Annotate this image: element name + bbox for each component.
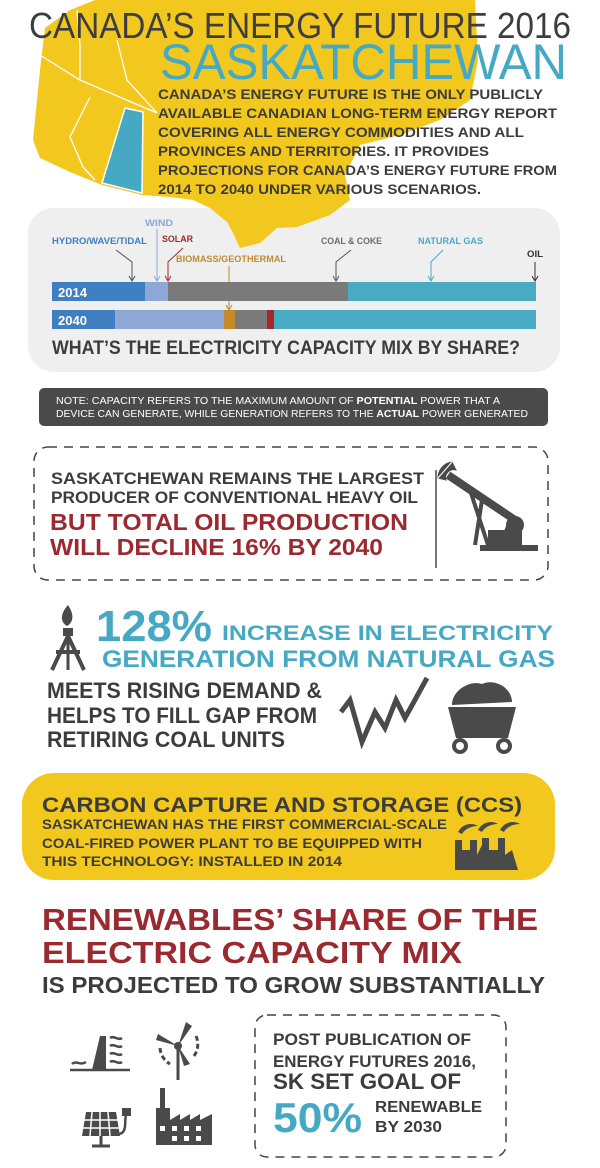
- heading: renewables: ELECTRIC CAPACITY MIX: [42, 935, 462, 970]
- intro paragraph: PROJECTIONS FOR CANADA’S ENERGY FUTURE FROM: [158, 162, 557, 178]
- subtitle: saskatchewan: SASKATCHEWAN: [160, 34, 567, 90]
- panel: carbon capture: THIS TECHNOLOGY: INSTALLED IN 2014: [42, 854, 343, 869]
- chart question: WHAT’S THE ELECTRICITY CAPACITY MIX BY SHARE?: [52, 338, 520, 359]
- legend labels: NATURAL GAS: [418, 236, 483, 246]
- panel: oil production: WILL DECLINE 16% BY 2040: [50, 534, 383, 560]
- icon: gas flare: [52, 605, 84, 670]
- legend labels: COAL & COKE: [321, 236, 382, 246]
- panel: 50% goal: ENERGY FUTURES 2016,: [273, 1052, 476, 1071]
- section: natural gas: MEETS RISING DEMAND &: [47, 678, 322, 703]
- icon: solar panel: [82, 1108, 131, 1146]
- panel: oil production: SASKATCHEWAN REMAINS THE LARGEST: [51, 469, 425, 488]
- section: natural gas: GENERATION FROM NATURAL GAS: [102, 646, 555, 673]
- panel: 50% goal: 50%: [273, 1094, 362, 1141]
- icon: factory: [156, 1088, 212, 1145]
- legend labels: WIND: [145, 218, 174, 228]
- note box: NOTE: CAPACITY REFERS TO THE MAXIMUM AMOUNT OF POTENTIAL POWER THAT A: [56, 395, 500, 407]
- legend labels: OIL: [527, 249, 544, 259]
- panel: carbon capture: COAL-FIRED POWER PLANT TO BE EQUIPPED WITH: [42, 836, 422, 851]
- bar 2040: [52, 310, 536, 329]
- panel: 50% goal: POST PUBLICATION OF: [273, 1030, 471, 1049]
- legend labels: SOLAR: [162, 234, 193, 244]
- panel: 50% goal: [255, 1015, 506, 1157]
- icon: pump jack: [436, 462, 538, 568]
- title: CANADA’S ENERGY FUTURE 2016: [29, 5, 571, 46]
- section: natural gas: RETIRING COAL UNITS: [47, 727, 285, 752]
- note box: [39, 388, 548, 426]
- icon: wind turbine: [156, 1022, 198, 1080]
- panel: 50% goal: BY 2030: [375, 1119, 442, 1136]
- intro paragraph: COVERING ALL ENERGY COMMODITIES AND ALL: [158, 124, 524, 140]
- icon: dam: [70, 1036, 130, 1070]
- arrows: [116, 229, 538, 310]
- heading: renewables: [42, 902, 545, 998]
- bar 2014: 2014: [58, 285, 88, 300]
- icon: zigzag chart: [341, 678, 427, 742]
- intro paragraph: PROVINCES AND TERRITORIES. IT PROVIDES: [158, 143, 489, 159]
- panel: oil production: PRODUCER OF CONVENTIONAL HEAVY OIL: [51, 488, 418, 507]
- section: natural gas: 128%: [96, 602, 212, 651]
- map: saskatchewan: [102, 108, 143, 193]
- icon: power plant: [455, 822, 520, 870]
- legend labels: HYDRO/WAVE/TIDAL: [52, 236, 148, 246]
- panel: oil production: [34, 447, 548, 580]
- panel: carbon capture: SASKATCHEWAN HAS THE FIRST COMMERCIAL-SCALE: [42, 817, 447, 832]
- panel background: capacity mix: [28, 208, 560, 372]
- panel: 50% goal: RENEWABLE: [375, 1099, 482, 1116]
- intro paragraph: CANADA’S ENERGY FUTURE IS THE ONLY PUBLICLY: [158, 86, 544, 102]
- note box: DEVICE CAN GENERATE, WHILE GENERATION REFERS TO THE ACTUAL POWER GENERATED: [56, 408, 528, 420]
- bar 2014: [52, 282, 536, 301]
- panel: capacity mix: [52, 218, 544, 359]
- section: natural gas: HELPS TO FILL GAP FROM: [47, 703, 317, 728]
- heading: renewables: RENEWABLES’ SHARE OF THE: [42, 902, 538, 937]
- section: natural gas: [47, 602, 555, 752]
- map: canada: [33, 0, 478, 248]
- icon: coal cart: [448, 682, 516, 752]
- intro paragraph: 2014 TO 2040 UNDER VARIOUS SCENARIOS.: [158, 181, 481, 197]
- intro paragraph: AVAILABLE CANADIAN LONG-TERM ENERGY REPORT: [158, 105, 557, 121]
- panel: 50% goal: SK SET GOAL OF: [273, 1069, 461, 1094]
- panel: carbon capture: CARBON CAPTURE AND STORAGE (CCS): [42, 794, 522, 817]
- legend labels: BIOMASS/GEOTHERMAL: [176, 254, 286, 264]
- bar 2040: 2040: [58, 313, 87, 328]
- heading: renewables: IS PROJECTED TO GROW SUBSTANTIALLY: [42, 972, 545, 998]
- panel: oil production: BUT TOTAL OIL PRODUCTION: [50, 509, 408, 535]
- panel: carbon capture: [22, 773, 555, 880]
- intro paragraph: [158, 86, 557, 197]
- section: natural gas: INCREASE IN ELECTRICITY: [222, 622, 553, 645]
- legend labels: [52, 218, 544, 264]
